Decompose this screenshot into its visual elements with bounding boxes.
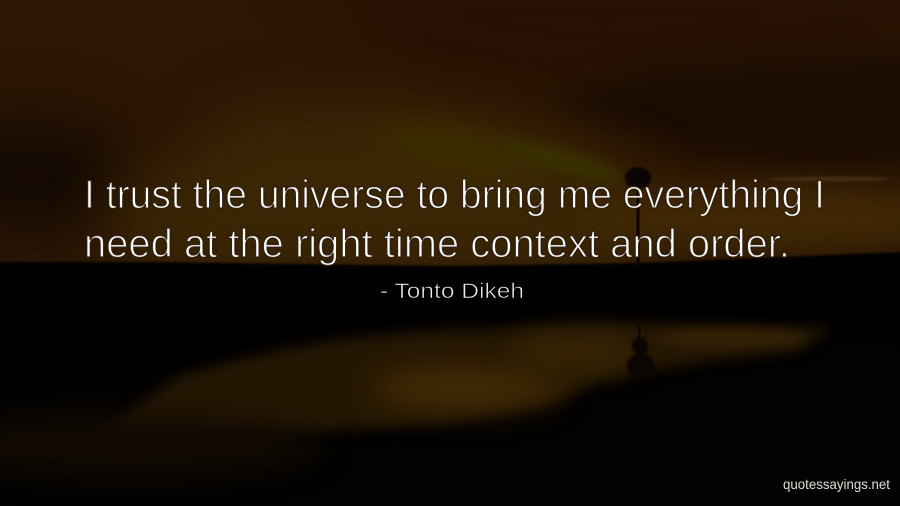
icon: palm tree reflection: [627, 325, 655, 379]
quote text: [84, 173, 825, 266]
attribution: - Tonto Dikeh: [380, 280, 524, 303]
icon: palm tree silhouette: [625, 167, 651, 266]
sky: [0, 0, 900, 275]
water reflection: [0, 323, 832, 475]
quote line 1: I trust the universe to bring me everything I: [84, 173, 825, 217]
quote line 2: need at the right time context and order.: [84, 222, 790, 266]
watermark: quotessayings.net: [783, 476, 890, 492]
dark treeline: [0, 252, 900, 378]
